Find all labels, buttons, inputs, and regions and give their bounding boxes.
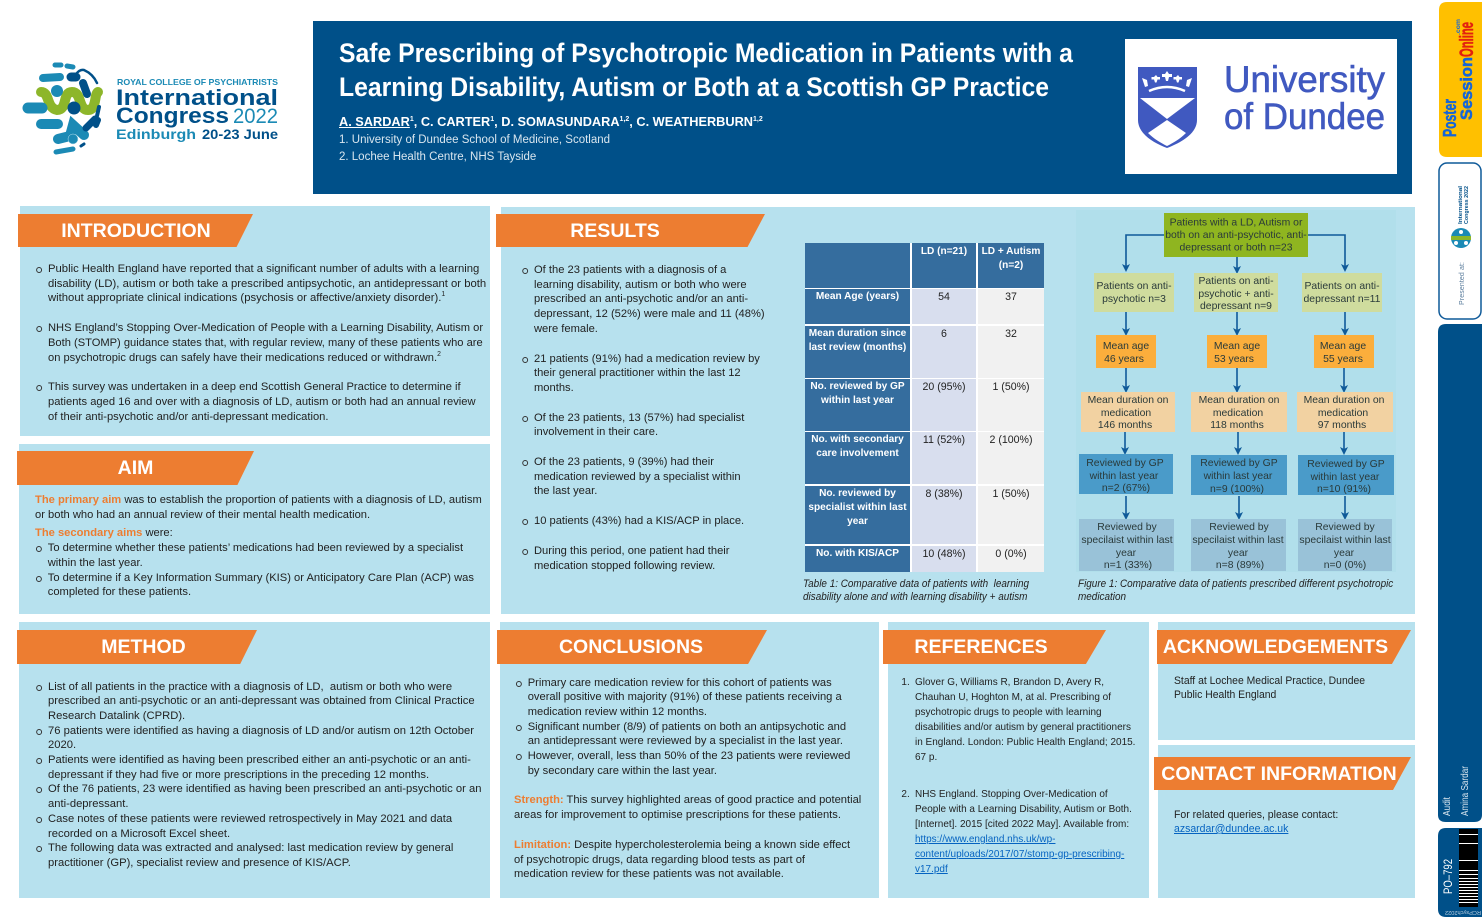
tab: topic and author: Audit — [1442, 797, 1453, 816]
aim text: To determine if a Key Information Summary (KIS) or Anticipatory Care Plan (ACP) was — [48, 572, 474, 584]
tab: presented at: Congress 2022 — [1464, 186, 1470, 224]
conclusions text: overall positive with majority (91%) of these patients receiving a — [528, 691, 842, 703]
references text — [901, 677, 1135, 875]
results text: were female. — [534, 323, 598, 335]
results text: medication reviewed by a specialist within — [534, 471, 741, 483]
box: mean age 53: 53 years — [1214, 354, 1254, 365]
references text: 67 p. — [915, 752, 937, 763]
heading: aim: AIM — [118, 457, 153, 479]
text: 1. — [901, 677, 910, 688]
heading: contact — [1154, 757, 1411, 790]
logo text: Congress — [116, 103, 229, 128]
method text: 2020. — [48, 739, 76, 751]
box: specialist 33 — [1079, 519, 1174, 571]
table: comparative data: 54 — [938, 291, 950, 303]
conclusions text: medication review within 12 months. — [528, 706, 707, 718]
results text: learning disability, autism or both who were — [534, 279, 747, 291]
results text: the last year. — [534, 485, 597, 497]
table caption — [803, 578, 1029, 602]
heading: acknowledgements: ACKNOWLEDGEMENTS — [1163, 636, 1388, 658]
conclusions text: Limitation: Despite hypercholesterolemia being a known side effect — [514, 839, 850, 851]
text: 2. — [901, 789, 910, 800]
box: GP review 100: within last year — [1203, 471, 1273, 482]
box: GP review 91: n=10 (91%) — [1317, 484, 1371, 495]
box: GP review 100: Reviewed by GP — [1200, 458, 1278, 469]
icon: congress dot globe — [28, 65, 99, 152]
acknowledgements text: Staff at Lochee Medical Practice, Dundee — [1174, 675, 1365, 687]
introduction text: patients aged 16 and over with a diagnosis of LD, autism or both had an annual review — [48, 396, 476, 408]
poster title — [339, 38, 1074, 102]
icon: Dundee shield — [1138, 67, 1197, 148]
box: GP review 67 — [1079, 454, 1173, 494]
box: specialist 0: Reviewed by — [1315, 522, 1376, 533]
poster title: Learning Disability, Autism or Both at a Scottish GP Practice — [339, 72, 1049, 102]
box: duration 118: medication — [1213, 408, 1263, 419]
aim text: To determine whether these patients’ medications had been reviewed by a specialist — [48, 542, 463, 554]
introduction text: disability (LD), autism or both take a prescribed antipsychotic, an antidepressant or both — [48, 278, 486, 290]
box: duration 97: medication — [1318, 408, 1368, 419]
header banner — [313, 21, 1412, 194]
logo text: Edinburgh — [116, 127, 196, 142]
table: comparative data: No. with secondary — [811, 434, 904, 445]
box: specialist 89: n=8 (89%) — [1216, 560, 1264, 571]
method text: 76 patients were identified as having a diagnosis of LD and/or autism on 12th October — [48, 725, 474, 737]
box: anti-psychotic — [1094, 273, 1174, 312]
logo text: 20-23 June — [202, 127, 279, 142]
box: anti-depressant: Patients on anti- — [1304, 281, 1380, 292]
box: both: depressant n=9 — [1200, 301, 1272, 312]
aim text: or both who had an annual review of their mental health medication. — [35, 509, 370, 521]
box: specialist 0: year — [1334, 548, 1355, 559]
tab: presented at: International — [1458, 185, 1464, 224]
box: GP review 91 — [1298, 455, 1394, 495]
table: comparative data: LD + Autism — [982, 246, 1040, 257]
tab: topic and author: Amina Sardar — [1460, 765, 1471, 816]
tab: topic and author — [1438, 324, 1482, 822]
conclusions text: medication review for these patients was not available. — [514, 868, 784, 880]
box: specialist 33: n=1 (33%) — [1104, 560, 1152, 571]
box: duration 118 — [1191, 392, 1287, 432]
introduction text: Both (STOMP) guidance states that, with regular review, many of these patients who are — [48, 337, 483, 349]
box: duration 118: Mean duration on — [1199, 395, 1280, 406]
heading: conclusions — [497, 630, 767, 664]
table: comparative data: 37 — [1005, 291, 1017, 303]
authors: A. SARDAR1, C. CARTER1, D. SOMASUNDARA1,2, C. WEATHERBURN1,2 — [339, 114, 763, 129]
tab: poster number and barcode: RCPsych2022 — [1445, 909, 1481, 915]
aim text: within the last year. — [48, 557, 143, 569]
results text: Of the 23 patients, 9 (39%) had their — [534, 456, 714, 468]
panel: method — [19, 622, 490, 898]
box: GP review 100 — [1191, 455, 1287, 495]
box: GP review 67: within last year — [1089, 471, 1159, 482]
table: comparative data: 0 (0%) — [995, 548, 1027, 560]
table: comparative data: No. reviewed by GP — [810, 381, 905, 392]
table: comparative data: 2 (100%) — [990, 434, 1032, 446]
logo: RCPsych International Congress 2022 — [22, 62, 279, 154]
box: GP review 91: Reviewed by GP — [1307, 459, 1385, 470]
table: comparative data: 6 — [941, 328, 947, 340]
tab: Poster Session Online: Session — [1457, 57, 1476, 120]
table: comparative data: Mean Age (years) — [816, 291, 899, 302]
box: GP review 67: Reviewed by GP — [1086, 458, 1164, 469]
box: mean age 55: Mean age — [1320, 341, 1366, 352]
tab: poster number and barcode — [1438, 828, 1482, 917]
references text: disabilities and/or autism by general practitioners — [915, 722, 1131, 733]
results text: involvement in their care. — [534, 426, 658, 438]
conclusions text: of psychotropic drugs, data regarding blood tests as part of — [514, 854, 805, 866]
results text: 10 patients (43%) had a KIS/ACP in place. — [534, 515, 744, 527]
heading: introduction: INTRODUCTION — [61, 220, 211, 242]
box: both: psychotic + anti- — [1198, 289, 1274, 300]
flowchart — [1079, 213, 1394, 571]
panel: aim — [19, 444, 490, 614]
figure caption — [1078, 578, 1394, 602]
acknowledgements text — [1174, 675, 1365, 700]
introduction text: Public Health England have reported that a significant number of adults with a learning — [48, 263, 479, 275]
table: comparative data: 1 (50%) — [992, 381, 1030, 393]
tab: poster number and barcode: PO–792 — [1443, 859, 1455, 894]
heading: introduction — [18, 214, 253, 247]
references text: Chauhan U, Hoghton M, at al. Prescribing of — [915, 692, 1111, 703]
results text: Of the 23 patients, 13 (57%) had specialist — [534, 412, 744, 424]
figure caption: medication — [1078, 590, 1126, 602]
box: mean age 46: Mean age — [1103, 341, 1149, 352]
table: comparative data: No. reviewed by — [819, 488, 896, 499]
box: GP review 91: within last year — [1310, 472, 1380, 483]
box: both — [1194, 273, 1278, 312]
box: specialist 33: Reviewed by — [1097, 522, 1158, 533]
figure caption: Figure 1: Comparative data of patients prescribed different psychotropic — [1078, 578, 1393, 590]
references text: [Internet]. 2015 [cited 2022 May]. Available from: — [915, 819, 1129, 830]
method text: Of the 76 patients, 23 were identified as having been prescribed an anti-psychotic or an — [48, 783, 481, 795]
results text: During this period, one patient had their — [534, 545, 729, 557]
arrows — [1125, 235, 1345, 517]
box: GP review 100: n=9 (100%) — [1210, 484, 1264, 495]
heading: references — [883, 630, 1106, 664]
table: comparative data: 8 (38%) — [925, 488, 963, 500]
logo text: ROYAL COLLEGE OF PSYCHIATRISTS — [117, 77, 278, 87]
references text: v17.pdf — [915, 864, 948, 875]
results text: Of the 23 patients with a diagnosis of a — [534, 264, 726, 276]
method text: prescribed an anti-psychotic or an anti-depressant was obtained from Clinical Practice — [48, 695, 475, 707]
table: comparative data: 20 (95%) — [922, 381, 966, 393]
box: specialist 33: year — [1116, 548, 1137, 559]
box: mean age 55: 55 years — [1323, 354, 1363, 365]
conclusions text: Primary care medication review for this cohort of patients was — [528, 676, 832, 688]
table: comparative data: specialist within last — [808, 502, 907, 513]
introduction text: of their anti-psychotic and/or anti-depressant medication. — [48, 411, 328, 423]
heading: results: RESULTS — [570, 220, 660, 242]
tab: Poster Session Online — [1439, 2, 1482, 157]
results text: depressant, 12 (52%) were male and 11 (48%) — [534, 308, 765, 320]
references text: People with a Learning Disability, Autism or Both. — [915, 804, 1132, 815]
box: anti-psychotic: Patients on anti- — [1096, 281, 1172, 292]
box: specialist 0: specilaist within last — [1299, 535, 1391, 546]
references text: in England. London: Public Health England; 2015. — [915, 737, 1135, 748]
method text: Patients were identified as having been prescribed either an anti-psychotic or an anti- — [48, 754, 471, 766]
logo text: 2022 — [233, 105, 278, 128]
box: specialist 0: n=0 (0%) — [1324, 560, 1366, 571]
contact text: azsardar@dundee.ac.uk — [1174, 823, 1288, 835]
heading: acknowledgements — [1157, 630, 1411, 664]
box: duration 97: 97 months — [1318, 420, 1366, 431]
conclusions text: Strength: This survey highlighted areas of good practice and potential — [514, 794, 861, 806]
conclusions text: areas for improvement to optimise prescriptions for these patients. — [514, 809, 841, 821]
header row — [805, 243, 910, 288]
conclusions text: by secondary care within the last year. — [528, 765, 717, 777]
logo wordmark — [1224, 59, 1385, 137]
box: specialist 89: year — [1228, 548, 1249, 559]
box: mean age 46: 46 years — [1104, 354, 1144, 365]
table: comparative data: 10 (48%) — [922, 548, 966, 560]
aim text: The primary aim was to establish the proportion of patients with a diagnosis of LD, autism — [35, 494, 482, 506]
method text — [36, 680, 481, 869]
table: comparative data: 11 (52%) — [923, 434, 965, 446]
aim text: completed for these patients. — [48, 586, 191, 598]
conclusions text: Significant number (8/9) of patients on both an antipsychotic and — [528, 721, 846, 733]
box: mean age 55 — [1314, 335, 1374, 368]
results text: months. — [534, 382, 574, 394]
method text: Research Datalink (CPRD). — [48, 710, 185, 722]
table: comparative data: within last year — [821, 395, 894, 406]
conclusions text: an antidepressant were reviewed by a specialist in the last year. — [528, 735, 843, 747]
box: mean age 53: Mean age — [1214, 341, 1260, 352]
table caption: disability alone and with learning disability + autism — [803, 590, 1027, 602]
heading: method: METHOD — [101, 636, 186, 658]
references text: https://www.england.nhs.uk/wp- — [915, 834, 1055, 845]
introduction text: on psychotropic drugs can safely have their medications reduced or withdrawn.2 — [48, 351, 441, 364]
introduction text: without appropriate clinical indications (psychosis or affective/anxiety disorder).1 — [48, 292, 445, 304]
tab: presented at — [1439, 163, 1481, 319]
box: specialist 89 — [1191, 519, 1286, 571]
box: specialist 33: specilaist within last — [1081, 535, 1173, 546]
heading: conclusions: CONCLUSIONS — [559, 636, 703, 658]
table caption: Table 1: Comparative data of patients with learning — [803, 578, 1029, 590]
panel: conclusions — [500, 622, 879, 898]
box: duration 97: Mean duration on — [1304, 395, 1385, 406]
top box: both on an anti-psychotic, anti- — [1165, 230, 1307, 241]
top box: depressant or both n=23 — [1180, 242, 1293, 254]
contact text: For related queries, please contact: — [1174, 809, 1338, 821]
box: both: Patients on anti- — [1198, 276, 1274, 287]
poster title: Safe Prescribing of Psychotropic Medication in Patients with a — [339, 38, 1073, 68]
heading: contact: CONTACT INFORMATION — [1161, 763, 1397, 785]
heading: method — [17, 630, 257, 664]
panel: introduction — [20, 206, 490, 436]
box: specialist 89: Reviewed by — [1209, 522, 1270, 533]
method text: depressant if they had five or more prescriptions in the preceding 12 months. — [48, 769, 429, 781]
tab: Poster Session Online: Poster — [1440, 99, 1460, 137]
table: comparative data: care involvement — [816, 448, 899, 459]
results text: prescribed an anti-psychotic and/or an anti- — [534, 293, 748, 305]
table: comparative data: 32 — [1005, 328, 1017, 340]
results text: their general practitioner within the last 12 — [534, 367, 741, 379]
table: comparative data — [805, 243, 1044, 572]
logo wordmark: University — [1224, 59, 1385, 100]
logo text — [116, 77, 279, 142]
box: duration 118: 118 months — [1210, 420, 1264, 431]
introduction text: This survey was undertaken in a deep end Scottish General Practice to determine if — [48, 381, 461, 393]
panel: acknowledgements — [1158, 622, 1415, 740]
conclusions text — [514, 676, 861, 880]
method text: The following data was extracted and analysed: last medication review by general — [48, 842, 453, 854]
heading: aim — [17, 451, 254, 485]
table: comparative data: year — [847, 516, 868, 527]
results text: medication stopped following review. — [534, 560, 715, 572]
table: comparative data: 1 (50%) — [992, 488, 1030, 500]
references text: NHS England. Stopping Over-Medication of — [915, 789, 1108, 800]
top box: Patients with a LD, Autism or — [1170, 218, 1303, 228]
panel: results — [501, 207, 1415, 614]
box: specialist 89: specilaist within last — [1192, 535, 1284, 546]
method text: recorded on a Microsoft Excel sheet. — [48, 828, 230, 840]
heading: results — [496, 214, 765, 247]
references text: Glover G, Williams R, Brandon D, Avery R, — [915, 677, 1104, 688]
logo: University of Dundee — [1125, 39, 1397, 174]
method text: Case notes of these patients were reviewed retrospectively in May 2021 and data — [48, 813, 452, 825]
box: duration 146: Mean duration on — [1088, 395, 1169, 406]
results text — [522, 264, 765, 572]
method text: anti-depressant. — [48, 798, 128, 810]
conclusions text: However, overall, less than 50% of the 23 patients were reviewed — [528, 750, 850, 762]
introduction text — [36, 263, 486, 423]
aim text: The secondary aims were: — [35, 527, 173, 539]
table: comparative data: Mean duration since — [809, 328, 906, 339]
box: mean age 46 — [1096, 335, 1156, 368]
box: duration 146: 146 months — [1098, 420, 1152, 431]
contact text — [1174, 809, 1338, 835]
table: comparative data: (n=2) — [999, 260, 1023, 271]
acknowledgements text: Public Health England — [1174, 688, 1276, 700]
table: comparative data: No. with KIS/ACP — [816, 548, 899, 559]
box: duration 97 — [1297, 392, 1393, 432]
sidebar — [1438, 2, 1482, 917]
box: anti-depressant: depressant n=11 — [1304, 294, 1381, 305]
top box — [1164, 213, 1308, 257]
introduction text: NHS England’s Stopping Over-Medication of People with a Learning Disability, Autism or — [48, 322, 483, 334]
references text: psychotropic drugs to people with learning — [915, 707, 1102, 718]
table: comparative data: LD (n=21) — [921, 246, 967, 257]
method text: practitioner (GP), specialist review and presence of KIS/ACP. — [48, 857, 351, 869]
references text: content/uploads/2017/07/stomp-gp-prescribing- — [915, 849, 1124, 860]
box: specialist 0 — [1298, 519, 1392, 571]
panel: references — [888, 622, 1149, 898]
heading: references: REFERENCES — [914, 636, 1048, 658]
logo text: International — [116, 85, 278, 110]
tab: presented at: Presented at: — [1459, 262, 1466, 305]
affiliations: 1. University of Dundee School of Medicine, Scotland — [339, 134, 610, 146]
box: duration 146: medication — [1101, 408, 1151, 419]
box: anti-psychotic: psychotic n=3 — [1102, 294, 1166, 305]
box: duration 146 — [1081, 392, 1175, 432]
panel: contact — [1158, 745, 1415, 898]
affiliations — [339, 134, 610, 163]
box: anti-depressant — [1302, 273, 1382, 312]
method text: List of all patients in the practice with a diagnosis of LD, autism or both who were — [48, 680, 452, 692]
box: GP review 67: n=2 (67%) — [1102, 483, 1150, 494]
logo wordmark: of Dundee — [1224, 96, 1385, 137]
results text: 21 patients (91%) had a medication review by — [534, 353, 760, 365]
aim text — [35, 494, 482, 598]
box: mean age 53 — [1207, 335, 1267, 368]
table: comparative data: last review (months) — [809, 342, 906, 353]
tab: Poster Session Online: .com — [1456, 19, 1462, 35]
affiliations: 2. Lochee Health Centre, NHS Tayside — [339, 151, 536, 163]
